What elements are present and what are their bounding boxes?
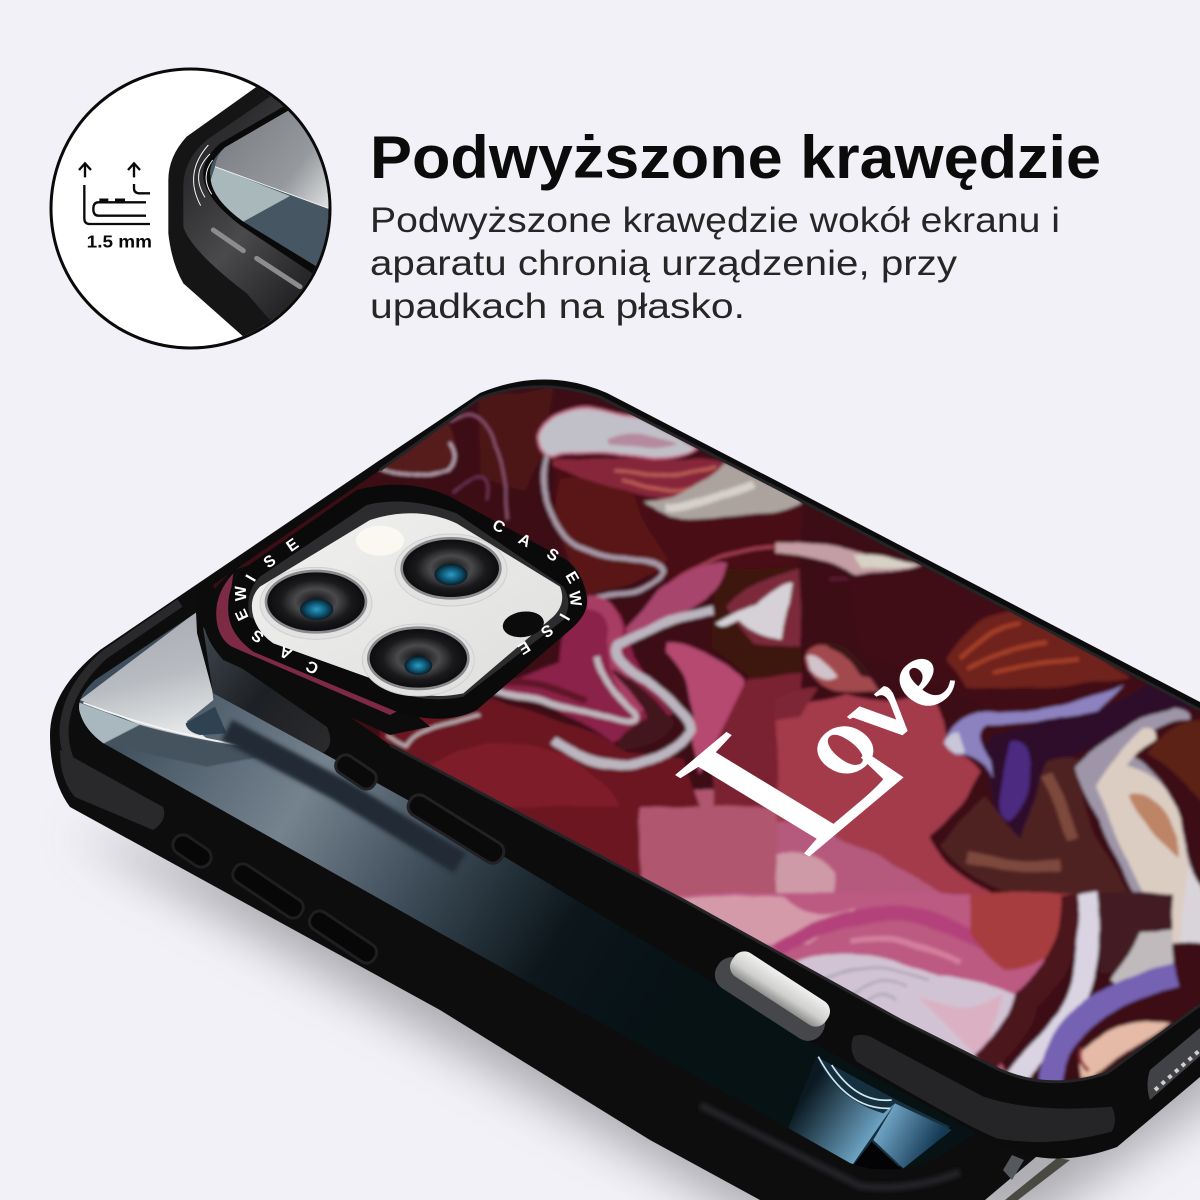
volume up bbox=[229, 860, 307, 922]
lower marble bbox=[663, 893, 1177, 1087]
shadow below front phone bbox=[227, 730, 460, 863]
silver switch bbox=[709, 947, 835, 1047]
CASEWISE ring text: I bbox=[243, 572, 260, 585]
step bracket bbox=[134, 184, 150, 193]
arrow left bbox=[79, 163, 91, 177]
1.5 mm icon bbox=[79, 163, 152, 252]
right speaker teeth bbox=[1155, 1050, 1200, 1090]
lens surround bbox=[395, 534, 507, 606]
lens surround bbox=[362, 624, 474, 696]
glossy lower corner bbox=[851, 1035, 1115, 1142]
line 1: Podwyższone krawędzie wokół ekranu i bbox=[370, 201, 1060, 240]
CASEWISE ring text: S bbox=[249, 625, 267, 646]
translucent bumper bbox=[183, 96, 316, 320]
CASEWISE ring text: A bbox=[276, 642, 295, 662]
rear silver strip bbox=[1005, 1158, 1070, 1200]
CASEWISE ring text: E bbox=[232, 606, 253, 623]
side button long bbox=[404, 791, 508, 867]
microphone hole bbox=[501, 609, 546, 640]
flash bbox=[356, 526, 404, 556]
CASEWISE ring text: C bbox=[303, 656, 322, 677]
lens glass bbox=[434, 564, 468, 585]
CASEWISE ring text: S bbox=[537, 620, 556, 641]
ring inner wall bbox=[248, 501, 568, 699]
CASEWISE ring text: E bbox=[284, 535, 302, 556]
upper-left and centre marble bbox=[360, 387, 801, 807]
drop shadow under phones bbox=[70, 830, 1200, 1200]
case side shading near camera bbox=[203, 627, 330, 753]
camera plate bbox=[252, 513, 562, 696]
CASEWISE ring text bbox=[232, 517, 584, 677]
phone screen bbox=[210, 111, 328, 266]
camera ring bbox=[228, 485, 587, 719]
rear frame lower glossy strip bbox=[700, 1105, 960, 1187]
light arcs bbox=[818, 1057, 892, 1108]
CASEWISE ring text: E bbox=[562, 569, 582, 587]
left side buttons bbox=[169, 831, 380, 967]
lens glass bbox=[300, 599, 333, 620]
outer bracket bbox=[84, 185, 150, 224]
measurement label: 1.5 mm bbox=[87, 232, 152, 252]
black triangle bbox=[850, 1142, 902, 1169]
Love logo bbox=[621, 588, 1041, 888]
lower pink underpaint bbox=[640, 790, 1010, 1080]
switch recess bbox=[709, 951, 831, 1047]
Love lettering: ove bbox=[762, 629, 987, 794]
highlight strip bbox=[213, 230, 300, 287]
circle fill bbox=[51, 69, 330, 348]
screen gradient bbox=[79, 612, 667, 1032]
CASEWISE ring text: E bbox=[514, 637, 533, 657]
rim inner line bbox=[380, 387, 1200, 1082]
line 2: aparatu chronią urządzenie, przy bbox=[370, 244, 958, 283]
marble back panel bbox=[190, 370, 1200, 1100]
lower crimson underpaint bbox=[510, 804, 642, 876]
wallpaper shadow fold bbox=[104, 724, 255, 767]
pale blue wedge bbox=[79, 702, 140, 744]
camera bump bbox=[203, 485, 587, 735]
white edge line bbox=[215, 167, 328, 208]
charging port bbox=[1148, 1028, 1200, 1100]
side button small bbox=[332, 751, 380, 793]
lens surround bbox=[260, 567, 372, 639]
lens left bbox=[260, 567, 372, 639]
bump case shoulder bbox=[203, 553, 430, 735]
Love lettering: L bbox=[621, 656, 961, 888]
CASEWISE ring text: S bbox=[261, 552, 280, 572]
white wallpaper line bbox=[83, 702, 237, 746]
blue glow right bbox=[873, 1103, 952, 1168]
lens glass bbox=[404, 656, 432, 675]
CASEWISE ring text: A bbox=[515, 531, 534, 551]
case outer bbox=[168, 87, 328, 336]
rear frame glossy corner bbox=[60, 750, 164, 830]
blue glow left bbox=[783, 1057, 895, 1168]
rear phone in case bbox=[50, 460, 1070, 1200]
phone layer bbox=[93, 202, 146, 216]
lens barrel bbox=[368, 628, 468, 689]
inner black rim bbox=[203, 106, 328, 274]
front phone case bbox=[190, 370, 1200, 1159]
description text bbox=[370, 201, 1060, 326]
arrow right bbox=[128, 163, 140, 177]
dark blue reflection bbox=[817, 1057, 950, 1167]
CASEWISE ring text: W bbox=[233, 585, 250, 601]
lens top right bbox=[395, 534, 507, 606]
line 3: upadkach na płasko. bbox=[370, 287, 745, 326]
title: Podwyższone krawędzie bbox=[370, 124, 1101, 191]
lens barrel bbox=[266, 571, 366, 632]
marble sliver by ring bbox=[216, 573, 397, 715]
volume down bbox=[306, 907, 380, 967]
dark wallpaper fold bbox=[186, 707, 227, 735]
right marble bbox=[777, 542, 1200, 943]
mute switch bbox=[169, 831, 215, 871]
CASEWISE ring text: C bbox=[489, 517, 508, 537]
light wallpaper area bbox=[80, 612, 232, 744]
rear case frame bbox=[50, 460, 1042, 1200]
raised edge detail circle bbox=[51, 69, 340, 360]
white curved marks bbox=[194, 145, 213, 206]
phone screen bbox=[79, 612, 952, 1170]
marble paint bbox=[190, 370, 1200, 1100]
lens bottom bbox=[362, 624, 474, 696]
rear frame highlight bbox=[64, 603, 180, 765]
CASEWISE ring text: W bbox=[565, 590, 584, 608]
switch metal pill bbox=[725, 947, 835, 1031]
CASEWISE ring text: S bbox=[543, 545, 562, 566]
case body bbox=[195, 380, 1200, 1159]
CASEWISE ring text: I bbox=[555, 610, 572, 623]
upper reflection bbox=[215, 110, 328, 208]
close-up of phone corner bbox=[168, 87, 328, 336]
layer bumps bbox=[99, 195, 125, 206]
light reflection bbox=[211, 167, 290, 222]
lens barrel bbox=[402, 538, 500, 598]
bottom port bbox=[1003, 1155, 1024, 1180]
